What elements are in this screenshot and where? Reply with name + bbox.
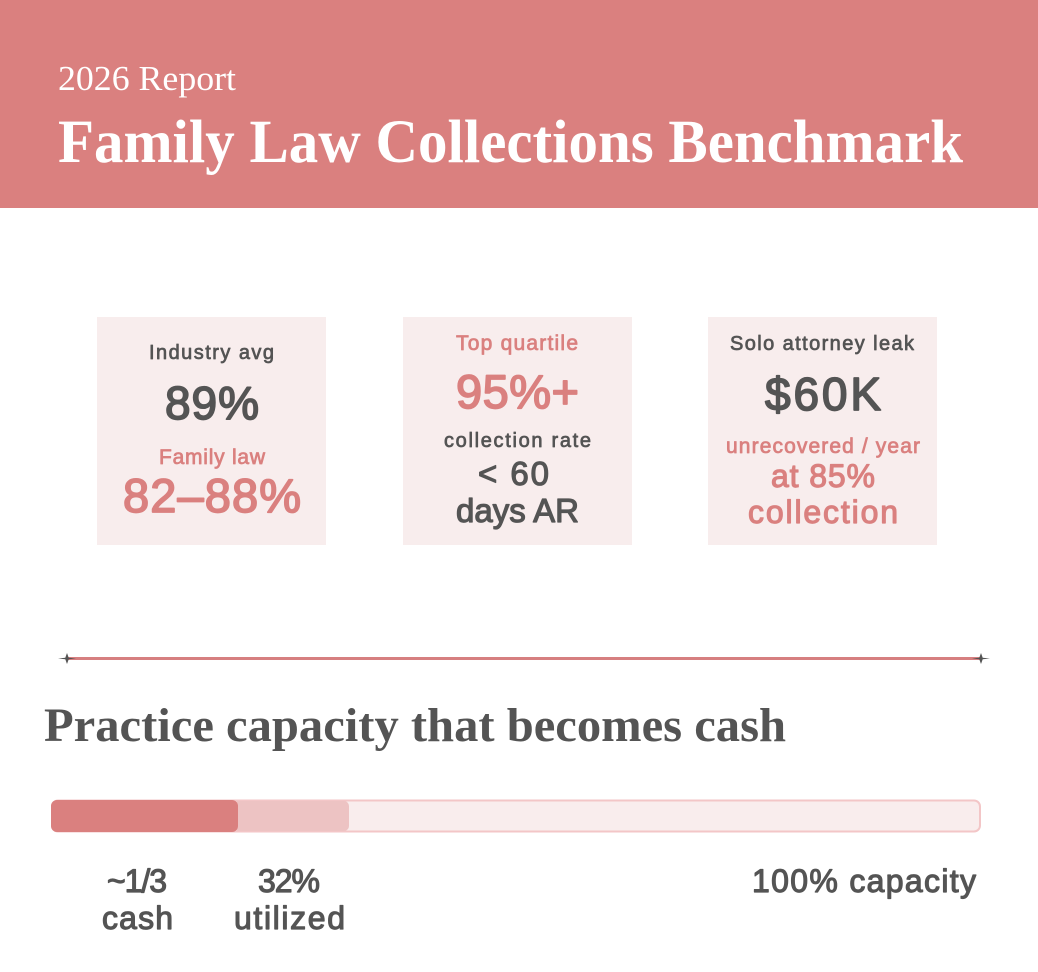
bar track bbox=[52, 800, 980, 832]
label: collection: collection bbox=[748, 494, 898, 530]
panel: industry average bbox=[97, 317, 326, 545]
stat: 82–88%: 82–88% bbox=[123, 469, 301, 522]
label: industry avg: Industry avg bbox=[149, 342, 274, 364]
panel: top quartile bbox=[403, 317, 632, 545]
stat: 89%: 89% bbox=[165, 377, 259, 429]
bar label: utilized: utilized bbox=[234, 900, 345, 936]
bar label: utilized bbox=[234, 863, 345, 936]
label: solo attorney leak: Solo attorney leak bbox=[730, 333, 915, 355]
stat: 95%+: 95%+ bbox=[456, 365, 579, 418]
label: top quartile: Top quartile bbox=[456, 332, 578, 355]
bar label: utilized: 32% bbox=[258, 863, 320, 899]
section heading: Practice capacity that becomes cash bbox=[44, 699, 786, 752]
label: unrecovered per year: unrecovered / year bbox=[726, 435, 920, 458]
stat: $60K: $60K bbox=[765, 368, 881, 420]
report label: 2026 Report bbox=[58, 59, 236, 98]
bar label: capacity: 100% capacity bbox=[752, 863, 976, 899]
bar segment: utilized bbox=[234, 801, 349, 831]
title: Family Law Collections Benchmark bbox=[58, 109, 963, 176]
header banner bbox=[0, 0, 1038, 208]
bar label: cash: ~1/3 bbox=[107, 863, 167, 899]
bar label: cash: cash bbox=[102, 900, 173, 936]
divider with star ends bbox=[58, 653, 990, 664]
label: days AR: days AR bbox=[456, 492, 579, 529]
capacity bar bbox=[51, 800, 980, 832]
stat: under 60: < 60 bbox=[478, 455, 549, 492]
label: family law: Family law bbox=[159, 446, 266, 469]
bar label: cash bbox=[102, 863, 173, 936]
panel: solo attorney leak bbox=[708, 317, 937, 545]
bar segment: cash bbox=[51, 800, 238, 832]
label: collection rate: collection rate bbox=[444, 430, 591, 452]
label: at 85%: at 85% bbox=[771, 458, 875, 494]
